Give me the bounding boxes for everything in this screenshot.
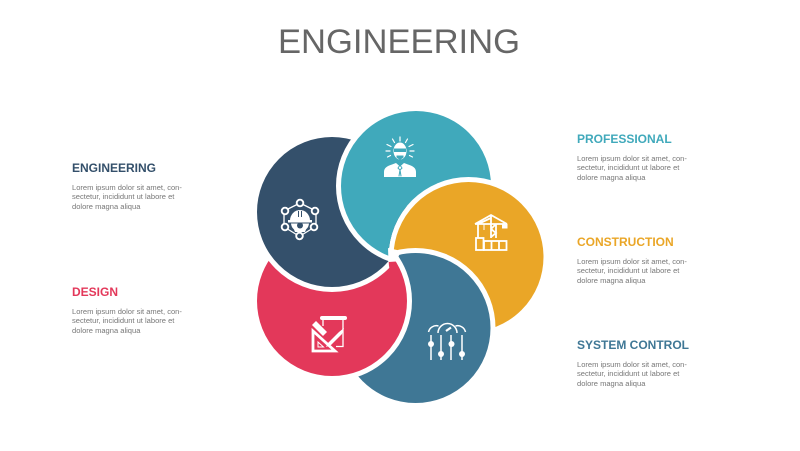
- text block: engineering: ENGINEERING: [72, 161, 156, 175]
- icon: professional with idea rays: [384, 137, 416, 177]
- text block: professional: [577, 132, 687, 182]
- text block: professional: Lorem ipsum dolor sit amet, con-: [577, 154, 687, 162]
- text block: design: sectetur, incididunt ut labore et: [72, 316, 174, 325]
- text block: system control: Lorem ipsum dolor sit amet, con-: [577, 360, 687, 368]
- text block: construction: [577, 235, 687, 285]
- petal: professional: [338, 108, 494, 264]
- text block: engineering: [72, 161, 182, 211]
- text block: professional: PROFESSIONAL: [577, 132, 672, 146]
- title: ENGINEERING: [278, 23, 520, 61]
- text block: system control: dolore magna aliqua: [577, 379, 645, 388]
- text block: system control: SYSTEM CONTROL: [577, 338, 689, 352]
- text block: design: dolore magna aliqua: [72, 326, 140, 335]
- text block: engineering: Lorem ipsum dolor sit amet, con-: [72, 182, 182, 192]
- text block: system control: sectetur, incididunt ut labore et: [577, 369, 679, 378]
- text block: design: DESIGN: [72, 285, 118, 299]
- text block: construction: dolore magna aliqua: [577, 276, 645, 285]
- text block: construction: sectetur, incididunt ut labore et: [577, 266, 679, 275]
- text block: engineering: sectetur, incididunt ut labore et: [72, 192, 174, 201]
- text block: system control: [577, 338, 689, 388]
- icon: system control sliders and gauges: [428, 324, 466, 360]
- text block: professional: sectetur, incididunt ut labore et: [577, 163, 679, 172]
- icon: construction crane and containers: [475, 215, 508, 250]
- text block: construction: Lorem ipsum dolor sit amet, con-: [577, 256, 687, 266]
- petal: engineering: [254, 134, 410, 290]
- petal: design: [254, 224, 410, 378]
- text block: professional: dolore magna aliqua: [577, 173, 645, 182]
- text block: construction: CONSTRUCTION: [577, 235, 674, 249]
- text block: design: [72, 285, 182, 335]
- icon: engineering network with hard hat and gear: [282, 200, 318, 239]
- white junction where the petals meet: [388, 248, 400, 262]
- icon: design scroll, ruler and pen: [312, 316, 347, 351]
- text block: engineering: dolore magna aliqua: [72, 202, 140, 211]
- text block: design: Lorem ipsum dolor sit amet, con-: [72, 306, 182, 316]
- petal: construction: [391, 180, 546, 334]
- petal: system control: [338, 250, 493, 406]
- petal diagram: [257, 111, 544, 403]
